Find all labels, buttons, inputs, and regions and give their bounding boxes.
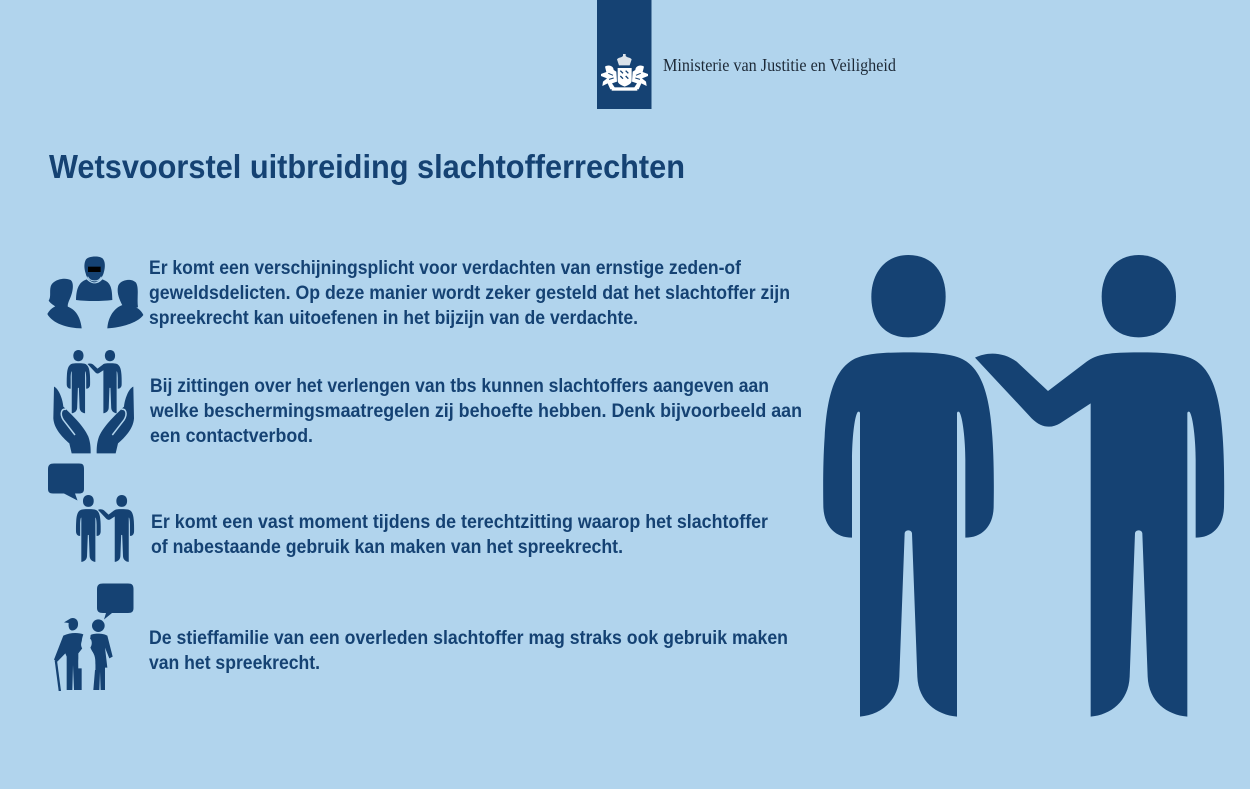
logo: Rijksoverheid ribbon with crest — [597, 0, 652, 109]
ministry name: Ministerie van Justitie en Veiligheid — [663, 55, 896, 75]
left lion — [601, 65, 617, 89]
text block: tbs hearings: welke beschermingsmaatregelen zij behoefte hebben. Denk bijvoorbeeld aan — [149, 401, 802, 422]
icon: family with speech bubble — [54, 584, 134, 691]
text block: tbs hearings — [149, 376, 802, 447]
text block: appearance obligation: spreekrecht kan uitoefenen in het bijzijn van de verdachte. — [149, 308, 638, 329]
shield — [618, 68, 632, 87]
title: Wetsvoorstel uitbreiding slachtofferrechten — [49, 149, 685, 186]
illustration: two large figures, hand on shoulder — [823, 255, 1224, 717]
icon: speech bubble with two people — [48, 464, 134, 562]
text block: step-family: van het spreekrecht. — [149, 653, 320, 674]
text block: appearance obligation — [149, 258, 790, 329]
text block: tbs hearings: Bij zittingen over het verlengen van tbs kunnen slachtoffers aangeven aan — [150, 376, 769, 397]
text block: tbs hearings: een contactverbod. — [150, 426, 313, 447]
text block: fixed moment at trial: of nabestaande gebruik kan maken van het spreekrecht. — [151, 537, 623, 558]
icon: two people held in hands — [53, 350, 134, 453]
text block: fixed moment at trial: Er komt een vast moment tijdens de terechtzitting waarop het slachtoffer — [151, 512, 769, 533]
text block: appearance obligation: Er komt een verschijningsplicht voor verdachten van ernstige zeden-of — [149, 258, 742, 279]
right lion — [632, 65, 648, 89]
icon: suspect with two listeners — [47, 257, 143, 328]
crown — [617, 54, 632, 65]
text block: step-family: De stieffamilie van een overleden slachtoffer mag straks ook gebruik maken — [149, 628, 788, 649]
text block: fixed moment at trial — [151, 512, 769, 558]
motto ribbon — [612, 87, 637, 91]
text block: appearance obligation: geweldsdelicten. Op deze manier wordt zeker gesteld dat het slachtoffer zijn — [149, 283, 790, 304]
text block: step-family — [149, 628, 788, 674]
